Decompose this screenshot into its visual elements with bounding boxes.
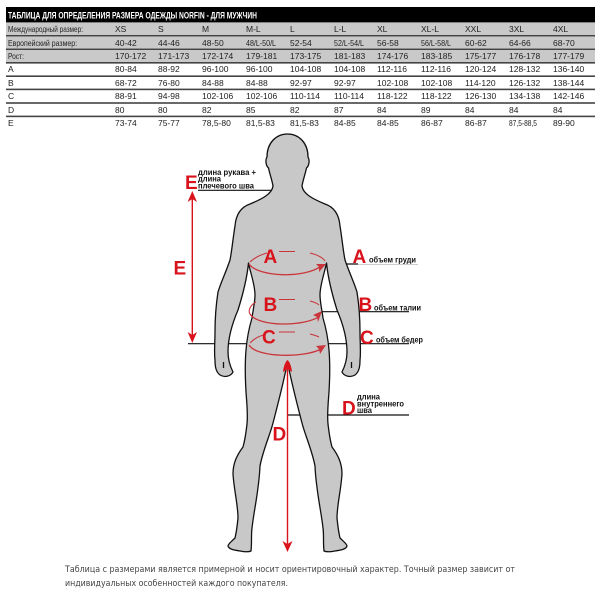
row: european size: 48-50 [202, 38, 224, 48]
row: A [8, 64, 584, 74]
D caption [357, 392, 404, 415]
row: E: 86-87 [465, 118, 487, 128]
row: B: 84-88 [246, 78, 268, 88]
measurement E: sleeve length [174, 167, 256, 343]
row: E: 89-90 [553, 118, 575, 128]
row: C: 126-130 [465, 91, 496, 101]
row: C [8, 91, 584, 101]
measurement D: inseam [272, 360, 404, 552]
measurement C: hips [249, 328, 423, 355]
row: A: 104-108 [290, 64, 321, 74]
row: height: 177-179 [553, 51, 584, 61]
size table [6, 7, 595, 128]
row: european size: 56-58 [377, 38, 399, 48]
row: E: 87,5-88,5 [509, 118, 537, 128]
row: international size: 4XL [553, 24, 568, 34]
row: E: 84-85 [334, 118, 356, 128]
measurement A: chest: A [352, 247, 366, 268]
row: C: 102-106 [202, 91, 233, 101]
E letters: E [185, 173, 198, 194]
black measurement lines [188, 190, 409, 415]
E caption: длина рукава + [198, 167, 256, 177]
row: D [8, 105, 563, 115]
row: international size: M [202, 24, 209, 34]
row: height: 179-181 [246, 51, 277, 61]
row: E: 78,5-80 [202, 118, 231, 128]
row: height: Рост: [8, 51, 24, 61]
row: A: 104-108 [334, 64, 365, 74]
row: D: 82 [202, 105, 212, 115]
row: A: 120-124 [465, 64, 496, 74]
row: B: 102-108 [421, 78, 452, 88]
row: B: B [8, 78, 14, 88]
D arrow [282, 360, 292, 552]
row: international size: L [290, 24, 295, 34]
row: international size: XL [377, 24, 388, 34]
row: C: 110-114 [334, 91, 364, 101]
row: C: 118-122 [421, 91, 452, 101]
measurement B: waist: B [358, 295, 372, 316]
row: C: 110-114 [290, 91, 320, 101]
row: C: 102-106 [246, 91, 277, 101]
row: B: 92-97 [290, 78, 312, 88]
row: C: 94-98 [158, 91, 180, 101]
row: B [8, 78, 584, 88]
E arrow [188, 191, 197, 343]
row: D: 80 [158, 105, 168, 115]
row: european size: 56/L-58/L [421, 38, 451, 48]
row: european size: 52-54 [290, 38, 312, 48]
row: european size: 48/L-50/L [246, 38, 276, 48]
row: C: 118-122 [377, 91, 408, 101]
measurement E: sleeve length: E [174, 258, 186, 280]
row: D: 84 [465, 105, 475, 115]
row: B: 92-97 [334, 78, 356, 88]
row: E: 75-77 [158, 118, 180, 128]
row: height: 175-177 [465, 51, 496, 61]
row: european size: 40-42 [115, 38, 137, 48]
D caption: длина [357, 392, 380, 402]
row: D: 85 [246, 105, 256, 115]
row: D: 84 [553, 105, 563, 115]
row: international size: 3XL [509, 24, 524, 34]
measurement C: hips: C [262, 328, 276, 348]
E caption: плечевого шва [198, 180, 254, 190]
footnote: Таблица с размерами является примерной и носит ориентировочный характер. Точный размер зависит от [64, 565, 515, 575]
measurement A: chest [249, 247, 416, 275]
row: B: 84-88 [202, 78, 224, 88]
row: international size: S [158, 24, 164, 34]
row: C: 88-91 [115, 91, 137, 101]
row: height: 171-173 [158, 51, 189, 61]
row: european size: Европейский размер: [8, 38, 77, 48]
row: E: 81,5-83 [246, 118, 275, 128]
row: E: 86-87 [421, 118, 443, 128]
row: A: A [8, 64, 14, 74]
measurement B: waist: объем талии [374, 302, 421, 312]
row: european size: 64-66 [509, 38, 531, 48]
row: european size: 68-70 [553, 38, 575, 48]
row: D: 87 [334, 105, 344, 115]
row: B: 138-144 [553, 78, 584, 88]
row: international size: Международный размер: [8, 24, 83, 34]
row: A: 96-100 [202, 64, 229, 74]
row: A: 96-100 [246, 64, 273, 74]
row: A: 80-84 [115, 64, 137, 74]
row: D: D [8, 105, 14, 115]
row: C: 134-138 [509, 91, 540, 101]
hand creases [224, 362, 352, 368]
row: international size: M-L [246, 24, 261, 34]
row: B: 68-72 [115, 78, 137, 88]
row: international size: XXL [465, 24, 481, 34]
table title bar [6, 7, 595, 22]
D caption: внутреннего [357, 398, 404, 408]
row: E: 73-74 [115, 118, 137, 128]
row: D: 80 [115, 105, 125, 115]
row: height: 174-176 [377, 51, 408, 61]
row: A: 112-116 [421, 64, 451, 74]
row: A: 88-92 [158, 64, 180, 74]
row: B: 102-108 [377, 78, 408, 88]
row: height: 170-172 [115, 51, 146, 61]
table title bar: ТАБЛИЦА ДЛЯ ОПРЕДЕЛЕНИЯ РАЗМЕРА ОДЕЖДЫ NORFIN - ДЛЯ МУЖЧИН [8, 10, 257, 20]
row: B: 114-120 [465, 78, 496, 88]
row: height: 173-175 [290, 51, 321, 61]
row: height: 183-185 [421, 51, 452, 61]
row: european size: 60-62 [465, 38, 487, 48]
E caption [198, 167, 256, 190]
row: height: 176-178 [509, 51, 540, 61]
row: height [8, 51, 584, 61]
row: A: 136-140 [553, 64, 584, 74]
row: international size: XL-L [421, 24, 439, 34]
D caption: шва [357, 405, 372, 415]
row: C: 142-146 [553, 91, 584, 101]
row: height: 181-183 [334, 51, 365, 61]
row: european size: 44-46 [158, 38, 180, 48]
E caption: длина [198, 174, 221, 184]
row: international size: L-L [334, 24, 347, 34]
row: A: 128-132 [509, 64, 540, 74]
row: international size: XS [115, 24, 127, 34]
measurement C: hips: объем бедер [376, 334, 423, 344]
row: B: 126-132 [509, 78, 540, 88]
measurement B: waist [249, 295, 421, 324]
measurement D: inseam: D [342, 398, 356, 420]
measurement B: waist: B [264, 295, 277, 316]
row: E: 84-85 [377, 118, 399, 128]
row: E: 81,5-83 [290, 118, 319, 128]
row: D: 89 [421, 105, 431, 115]
row: E [8, 118, 575, 128]
row: european size [8, 38, 575, 48]
row: international size [8, 24, 568, 34]
D letters: D [272, 424, 286, 446]
row: C: C [8, 91, 14, 101]
row: european size: 52/L-54/L [334, 38, 364, 48]
row: E: E [8, 118, 14, 128]
row: A: 112-116 [377, 64, 407, 74]
row: B: 76-80 [158, 78, 180, 88]
measurement A: chest: объем груди [369, 254, 416, 264]
footnote [64, 565, 515, 589]
row: D: 82 [290, 105, 300, 115]
measurement A: chest: A [264, 247, 278, 268]
row: D: 84 [377, 105, 387, 115]
measurement C: hips: C [360, 328, 374, 349]
human body figure [215, 134, 360, 552]
row: height: 172-174 [202, 51, 233, 61]
row: D: 84 [509, 105, 519, 115]
footnote: индивидуальных особенностей каждого покупателя. [65, 579, 288, 589]
